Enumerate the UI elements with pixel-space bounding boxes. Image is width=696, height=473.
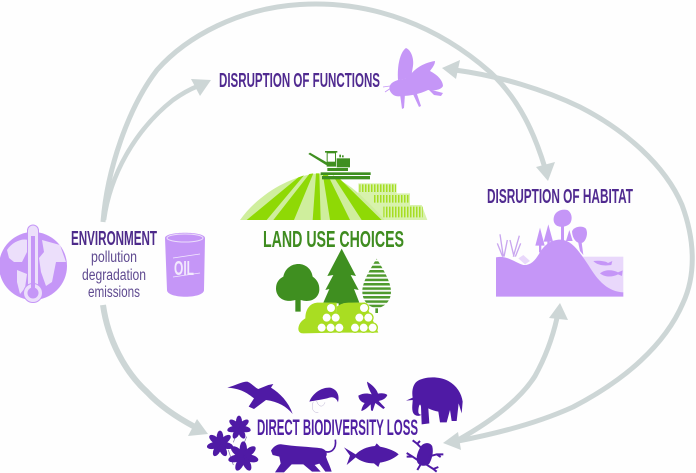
- icons: species: [206, 377, 463, 472]
- icon: conifer tree: [323, 249, 359, 312]
- icon: seabird: [227, 382, 293, 414]
- text: environment factors: emissions: [88, 284, 140, 301]
- icon: globe with thermometer: [0, 225, 67, 302]
- arrow: environment to direct biodiversity loss: [103, 305, 208, 436]
- heading: environment: ENVIRONMENT: [71, 227, 157, 250]
- icon: elephant: [406, 377, 463, 424]
- icon: bee: [358, 382, 387, 411]
- icon: trees and logs: [276, 249, 391, 333]
- icon: shrimp: [309, 388, 339, 412]
- reeds: [497, 234, 521, 257]
- icon: flowers: [206, 416, 259, 472]
- icon: stacked logs: [298, 303, 378, 333]
- icon: tuna: [344, 443, 399, 467]
- icon: broadleaf tree: [276, 264, 319, 312]
- arrow: environment to disruption of functions: [104, 79, 211, 220]
- striped field dome: [240, 173, 385, 220]
- icon: habitat landscape: [496, 210, 623, 297]
- icon: frog: [407, 440, 443, 472]
- heading: disruption of functions: DISRUPTION OF FUNCTIONS: [219, 69, 380, 92]
- combine harvester: [308, 151, 371, 179]
- text: environment factors: pollution: [91, 249, 137, 266]
- heading: direct biodiversity loss: DIRECT BIODIVERSITY LOSS: [257, 415, 418, 440]
- arrow: disruption of habitat to direct biodiversity loss: [458, 303, 568, 440]
- bird in wetland: [518, 255, 530, 264]
- water: [580, 257, 623, 293]
- arrow: disruption of functions to direct biodiversity loss: [442, 60, 692, 450]
- icon: striped poplar tree: [362, 259, 391, 313]
- fish: [593, 261, 623, 276]
- trees: [535, 210, 587, 255]
- icon: oil barrel: [165, 233, 205, 297]
- icon: pollinator bee: [383, 48, 443, 109]
- arrow: environment to disruption of habitat: [103, 4, 555, 222]
- stepped crop field: [358, 183, 427, 220]
- text: environment factors: [82, 249, 146, 301]
- icon: land use farm hill: [240, 151, 427, 220]
- heading: land use choices: LAND USE CHOICES: [263, 226, 404, 252]
- icon: oil barrel: OIL: [174, 258, 194, 280]
- icon: tiger: [271, 440, 336, 472]
- arrows: [103, 4, 692, 450]
- text: environment factors: degradation: [82, 267, 146, 284]
- land: [496, 240, 623, 297]
